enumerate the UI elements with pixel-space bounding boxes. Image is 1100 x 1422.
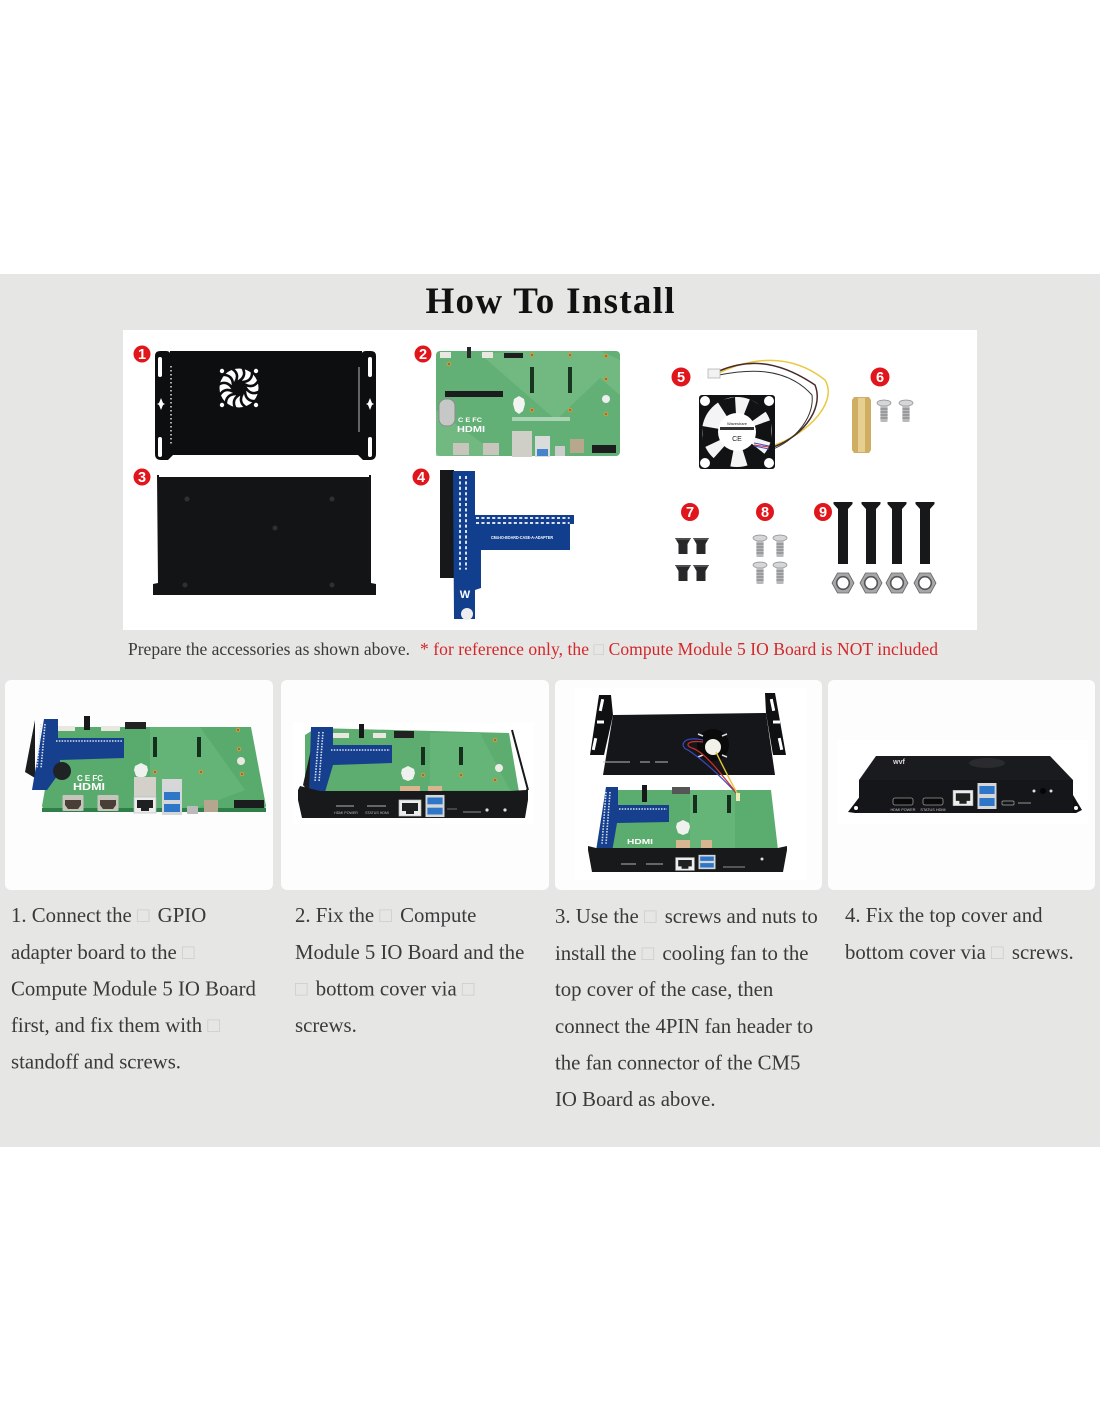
step 4 text: 4. Fix the top cover and — [845, 904, 1043, 927]
panel: step 1 photo — [5, 680, 273, 890]
step 3 text: IO Board as above. — [555, 1088, 716, 1111]
step 2 text — [295, 904, 524, 1037]
panel: step 4 photo: STATUS HDMI — [920, 808, 946, 812]
number badges: 9 — [819, 505, 827, 521]
step 1 text — [11, 904, 257, 1074]
step 4 text — [845, 904, 1074, 964]
step 2 text: 2. Fix the □ Compute — [295, 904, 476, 927]
panel: step 4 photo — [828, 680, 1095, 890]
panel: step 4 photo: HDMI POWER — [890, 808, 916, 812]
step 2 text: screws. — [295, 1014, 357, 1037]
caption: * for reference only, the □ Compute Module 5 IO Board is NOT included — [420, 639, 938, 659]
number badges: 5 — [677, 370, 685, 386]
step 3 text: the fan connector of the CM5 — [555, 1052, 800, 1074]
part 5: cooling fan: Waveshare — [727, 421, 748, 426]
number badges: 3 — [138, 470, 146, 486]
step 2 text: □ bottom cover via □ — [295, 978, 477, 1000]
part 2: compute module IO board: C E FC — [458, 417, 482, 424]
step 1 text: adapter board to the □ — [11, 941, 198, 964]
part 1: top cover — [155, 351, 376, 460]
caption: Prepare the accessories as shown above. — [128, 639, 410, 659]
number badges: 7 — [686, 505, 694, 521]
part 4: GPIO adapter board: W — [460, 589, 471, 601]
title: How To Install — [426, 281, 674, 322]
number badges: 2 — [419, 347, 427, 363]
part 4: GPIO adapter board: CM4-IO-BOARD-CASE-A-ADAPTER — [491, 535, 554, 540]
step 1 text: Compute Module 5 IO Board — [11, 978, 257, 1000]
number badges: 4 — [417, 470, 425, 486]
part 4: GPIO adapter board — [440, 470, 574, 620]
step 1 text: first, and fix them with □ — [11, 1014, 223, 1037]
panel: step 2 photo: HDMI POWER — [334, 811, 358, 815]
panel: step 1 photo: C E FC — [77, 774, 103, 783]
part 5: cooling fan: CE — [732, 436, 742, 443]
number badges: 6 — [876, 370, 884, 386]
panel: accessories — [123, 330, 977, 630]
panel: step 1 photo: HDMI — [73, 782, 105, 793]
panel: step 3 photo — [555, 680, 822, 890]
step 3 text: top cover of the case, then — [555, 978, 774, 1001]
background band — [0, 274, 1100, 1147]
step 4 text: bottom cover via □ screws. — [845, 941, 1074, 964]
panel: step 4 photo: wvf — [892, 759, 906, 766]
step 1 text: standoff and screws. — [11, 1050, 181, 1074]
part 2: compute module IO board — [436, 347, 620, 457]
part 6: standoff and screws — [852, 397, 913, 453]
number badges: 1 — [138, 347, 146, 363]
step 2 text: Module 5 IO Board and the — [295, 941, 524, 964]
part 3: bottom cover — [153, 475, 376, 595]
panel: step 2 photo — [281, 680, 549, 890]
part 5: cooling fan — [699, 360, 828, 469]
number badges — [134, 346, 890, 521]
panel: step 3 photo: HDMI — [627, 839, 653, 846]
step 3 text: 3. Use the □ screws and nuts to — [555, 905, 818, 928]
part 8: silver screws — [753, 535, 787, 584]
panel: step 2 photo: STATUS HDMI — [365, 811, 389, 815]
step 3 text: install the □ cooling fan to the — [555, 942, 809, 965]
part 2: compute module IO board: HDMI — [457, 425, 485, 434]
part 9: long screws and nuts — [832, 502, 936, 593]
step 3 text — [555, 905, 818, 1111]
part 7: black screws — [675, 538, 709, 581]
number badges: 8 — [761, 505, 769, 521]
step 1 text: 1. Connect the □ GPIO — [11, 904, 206, 927]
step 3 text: connect the 4PIN fan header to — [555, 1015, 813, 1038]
